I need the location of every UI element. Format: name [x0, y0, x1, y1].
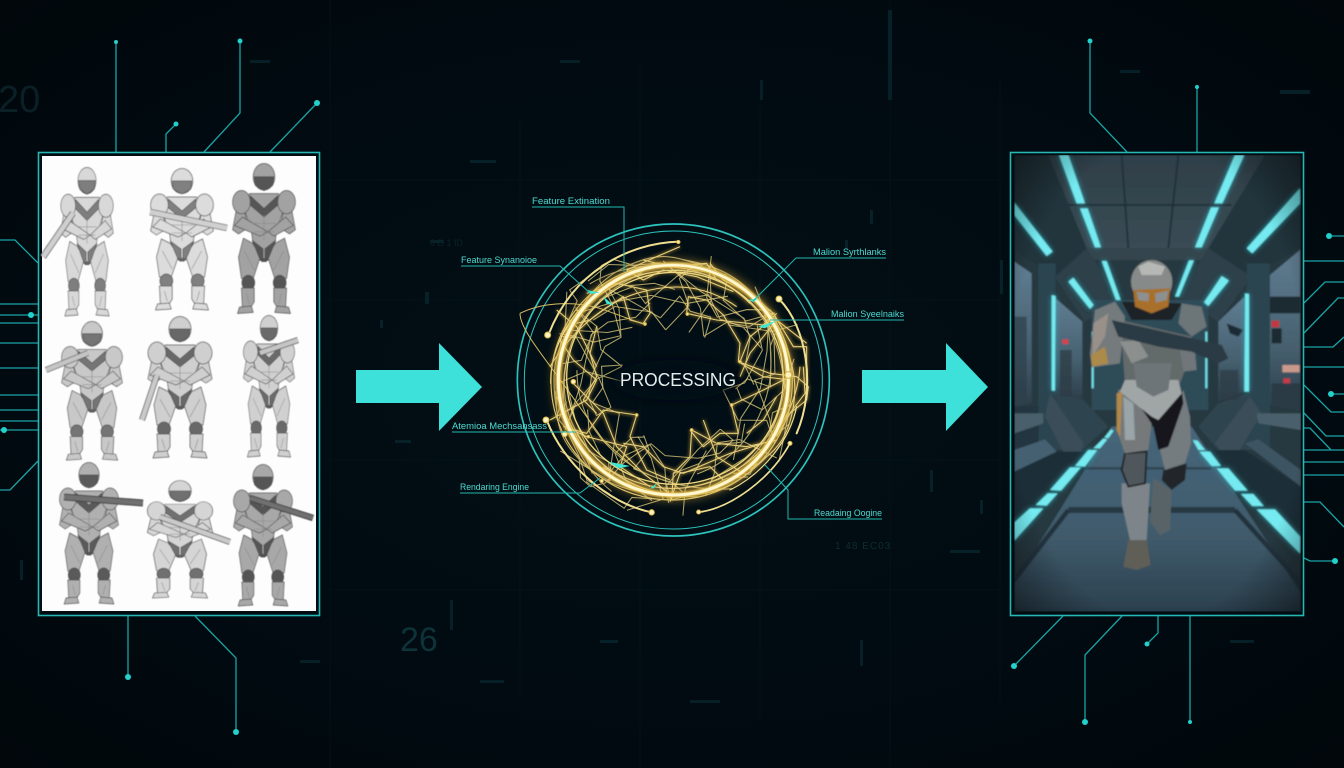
centre label: PROCESSING: PROCESSING [620, 370, 736, 390]
circuit traces: left [0, 38, 320, 735]
panel frame [38, 152, 320, 616]
label: Feature Synanoioe: Feature Synanoioe [461, 255, 537, 266]
circuit traces: right [1011, 38, 1344, 725]
outer arcs [547, 242, 807, 512]
soldier gun [1112, 320, 1228, 363]
soldier sketch row 1 right [233, 163, 295, 313]
soldier helmet [1122, 260, 1182, 320]
panel frame [1010, 152, 1304, 616]
teal sparks [587, 290, 777, 488]
bright energy ring [551, 263, 792, 500]
panel: rendered output scene [1010, 152, 1304, 616]
clear centre behind title [613, 360, 737, 400]
soldier sketch row 2 centre [142, 316, 212, 458]
label: Readaing Oogine: Readaing Oogine [814, 508, 882, 519]
soldier torso [1120, 320, 1192, 420]
tangled wires [487, 200, 853, 567]
soldier sketch row 3 left [60, 462, 143, 604]
panel: input sketch sheet [38, 152, 320, 616]
soldier sketch row 2 left [46, 322, 122, 460]
soldier sketch row 3 centre [147, 481, 230, 598]
label leader lines [452, 207, 904, 519]
label: Malion Syeelnaiks: Malion Syeelnaiks [831, 309, 904, 320]
soldier sketch row 3 right [234, 464, 313, 606]
sketch soldiers grid [43, 163, 313, 606]
arrow: processing to output [862, 343, 988, 431]
armoured soldier [1090, 260, 1228, 570]
label: Rendaring Engine: Rendaring Engine [460, 482, 529, 493]
sketch sheet paper [42, 156, 316, 611]
outer teal rings [517, 224, 829, 536]
tangled wires glow [550, 247, 808, 502]
soldier left leg [1122, 452, 1151, 570]
soldier right leg [1150, 463, 1187, 535]
soldier sketch row 1 centre [150, 168, 227, 310]
soldier thighs [1117, 388, 1191, 470]
label: Atemioa Mechsansass: Atemioa Mechsansass [452, 421, 547, 432]
soldier sketch row 1 left [43, 167, 113, 316]
city windows [1014, 250, 1300, 410]
image vignette [1014, 155, 1301, 612]
soldier sketch row 2 right [243, 316, 298, 457]
glow of energy ring [558, 265, 788, 495]
corridor scene [1014, 155, 1301, 612]
left wire loop [520, 304, 643, 470]
label: Feature Extination: Feature Extination [532, 196, 610, 207]
background grid and faint data: 0 D 1 ID [430, 238, 464, 248]
processing circle [487, 200, 853, 567]
background grid and faint data: 26 [400, 621, 438, 659]
corridor structure [1014, 155, 1301, 612]
ceiling and floor light strips [1014, 155, 1300, 553]
background grid and faint data: 1 48 EC03 [835, 541, 891, 552]
arrow: input to processing [356, 343, 482, 431]
wire nodes [543, 240, 792, 515]
soldier shoulders and arms [1090, 302, 1207, 372]
label: Mallon Syrtilanks: Malion Syrthlanks [813, 247, 886, 258]
